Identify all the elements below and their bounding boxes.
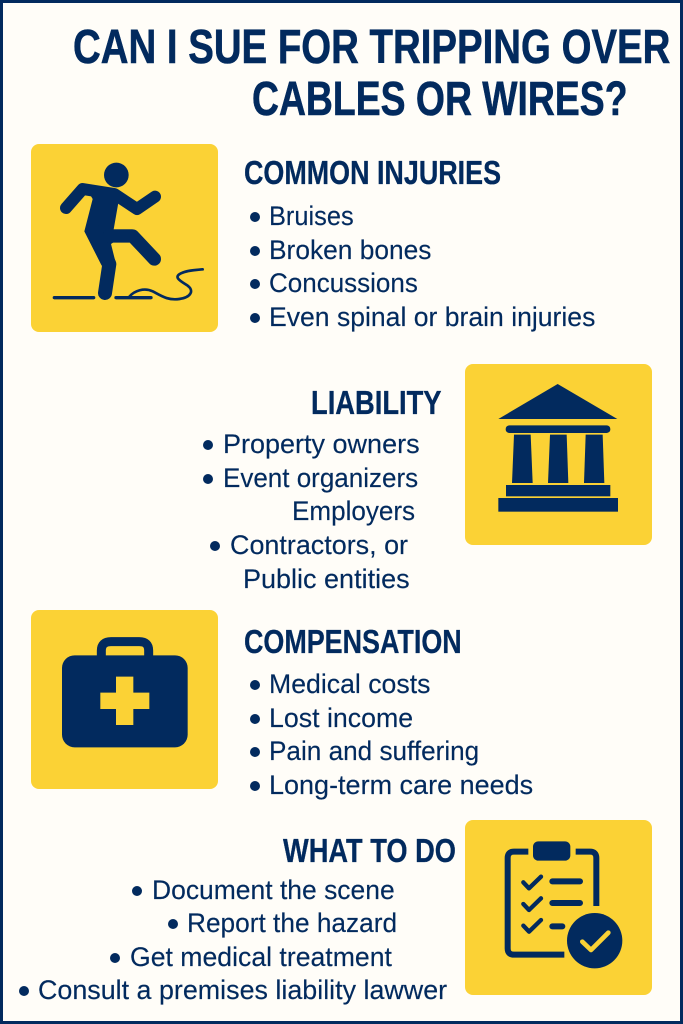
list: liability: Property owners [223,429,420,459]
list: what to do: Consult a premises liability lawwer [38,975,447,1005]
heading: what to do: WHAT TO DO [283,832,456,869]
title: CAN I SUE FOR TRIPPING OVER [73,21,670,74]
list: common injuries: Bruises [269,201,354,231]
list: compensation: Pain and suffering [269,736,479,766]
list: what to do [19,875,447,1005]
list: compensation: Medical costs [269,669,430,699]
list: common injuries: Broken bones [269,235,431,265]
list: compensation [250,669,533,800]
icon: checklist [508,841,622,968]
list: what to do: Get medical treatment [130,942,392,972]
icon: first aid kit [62,642,188,747]
list: liability: Contractors, or [230,530,408,560]
icon: tripping person [54,163,203,299]
list: what to do: Report the hazard [187,908,397,938]
list: liability: Public entities [243,564,410,594]
panel: common injuries icon [31,144,218,332]
list: liability [203,429,420,594]
title [73,21,670,126]
panel: liability icon [465,364,652,545]
list: liability: Event organizers [223,463,418,493]
list: common injuries [250,201,595,332]
heading: compensation: COMPENSATION [244,623,462,660]
heading: liability: LIABILITY [311,384,442,421]
list: common injuries: Concussions [269,268,418,298]
panel: what to do icon [465,820,652,995]
list: what to do: Document the scene [152,875,395,905]
icon: courthouse [498,384,618,512]
panel: compensation icon [31,610,218,789]
list: common injuries: Even spinal or brain injuries [269,302,595,332]
heading: common injuries: COMMON INJURIES [244,154,501,191]
list: compensation: Lost income [269,703,413,733]
title: CABLES OR WIRES? [252,73,628,126]
list: liability: Employers [292,496,415,526]
list: compensation: Long-term care needs [269,770,533,800]
